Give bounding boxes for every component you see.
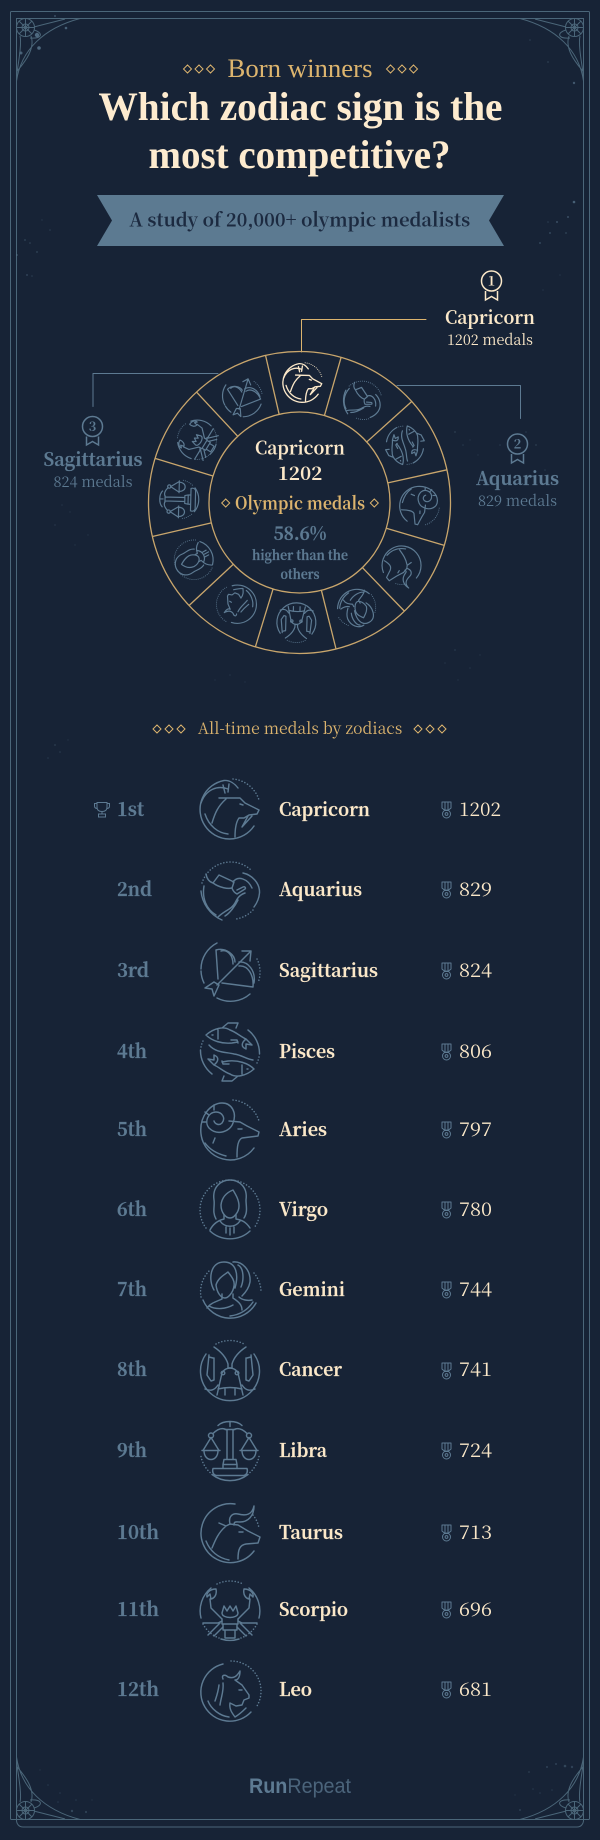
subtitle ribbon: A study of 20,000+ olympic medalists (129, 206, 470, 232)
row: 11th Scorpio (117, 1581, 492, 1640)
icon: medal (442, 1682, 451, 1698)
row: 6th Virgo: 6th (117, 1194, 147, 1222)
row: 8th Cancer: 8th (117, 1354, 147, 1382)
wheel icon: Scorpio (170, 413, 224, 467)
row: 9th Libra: 9th (117, 1435, 147, 1463)
icon: badge 2 (508, 434, 528, 463)
icon: badge 1 (482, 270, 502, 300)
wheel icon: Aries (399, 486, 440, 525)
row: 12th Leo (117, 1661, 492, 1721)
medal count: 824 medals (54, 471, 132, 492)
row: 10th Taurus (117, 1504, 492, 1563)
row: 8th Cancer: 741 (459, 1354, 492, 1382)
icon: trophy (94, 802, 110, 817)
icon: badge 1: 1 (488, 270, 495, 290)
logo: RunRepeat: RunRepeat (249, 1774, 351, 1798)
wheel icon: Pisces (379, 419, 431, 471)
row: 7th Gemini: 7th (117, 1274, 147, 1302)
subtitle ribbon (97, 195, 504, 246)
row: 4th Pisces: 4th (117, 1036, 147, 1064)
row: 2nd Aquarius: Aquarius (279, 875, 362, 902)
wheel icon: Gemini (330, 582, 383, 634)
connector line (397, 386, 520, 418)
wheel icon: Sagittarius (217, 371, 269, 424)
callout: 3rd Sagittarius (44, 374, 218, 492)
row: 5th Aries: 797 (459, 1114, 492, 1142)
row: 7th Gemini: 744 (459, 1274, 492, 1302)
medal count: 1202 medals (447, 329, 533, 350)
row: 6th Virgo: Virgo (279, 1195, 328, 1222)
icon: Pisces (200, 1023, 260, 1081)
sign name: Capricorn (445, 303, 535, 330)
row: 3rd Sagittarius: 3rd (117, 955, 149, 983)
row: 5th Aries: Aries (279, 1115, 327, 1142)
medal count: 829 medals (478, 490, 557, 511)
callout: 2nd Aquarius (397, 386, 559, 511)
icon: medal (442, 1525, 451, 1541)
zodiac wheel (148, 352, 450, 654)
row: 7th Gemini (117, 1262, 492, 1318)
row: 9th Libra: 724 (459, 1435, 492, 1463)
icon: Leo (201, 1661, 261, 1721)
row: 9th Libra (117, 1422, 492, 1481)
wheel centre text (222, 434, 378, 584)
row: 12th Leo: Leo (279, 1675, 312, 1702)
icon: medal (442, 1202, 451, 1218)
row: 5th Aries: 5th (117, 1114, 147, 1142)
row: 3rd Sagittarius (117, 943, 492, 1001)
wheel icon: Leo (209, 577, 264, 632)
icon: badge 3: 3 (89, 416, 97, 435)
kicker text: Born winners (228, 54, 372, 83)
icon: Sagittarius (201, 943, 260, 1001)
icon: medal (442, 802, 451, 818)
icon: medal (442, 1602, 451, 1618)
row: 8th Cancer (117, 1341, 492, 1401)
row: 4th Pisces: Pisces (279, 1037, 335, 1064)
row: 5th Aries (117, 1100, 492, 1160)
wheel icon: Virgo (167, 533, 220, 587)
icon: Capricorn (200, 779, 259, 839)
icon: medal (442, 963, 451, 979)
centre percent: 58.6% (274, 519, 326, 546)
row: 10th Taurus: Taurus (279, 1518, 343, 1545)
row: 4th Pisces: 806 (459, 1036, 492, 1064)
row: 12th Leo: 12th (117, 1674, 159, 1702)
connector line (93, 374, 218, 406)
rankings list (94, 779, 501, 1721)
icon: medal (442, 882, 451, 898)
row: 3rd Sagittarius: 824 (459, 955, 492, 983)
centre note line 2: others (280, 564, 320, 584)
icon: medal (442, 1443, 451, 1459)
callout: 1st Capricorn (302, 270, 535, 352)
title: most competitive? (148, 132, 450, 177)
left diamonds (184, 65, 214, 73)
row: 12th Leo: 681 (459, 1674, 492, 1702)
wheel icon: Aquarius (336, 374, 389, 427)
row: 6th Virgo (117, 1180, 492, 1239)
wheel icon: Capricorn (282, 362, 322, 403)
centre label: Olympic medals (235, 490, 365, 516)
icon: medal (442, 1363, 451, 1379)
centre count: 1202 (278, 459, 322, 486)
row: 2nd Aquarius: 2nd (117, 874, 152, 902)
kicker: Born winners (184, 54, 418, 83)
icon: badge 3 (82, 416, 102, 445)
row: 9th Libra: Libra (279, 1436, 328, 1463)
row: 2nd Aquarius (117, 862, 492, 920)
wheel rings (148, 352, 450, 654)
row: 1st Capricorn: Capricorn (279, 795, 370, 822)
icon: Taurus (201, 1504, 260, 1563)
row: 6th Virgo: 780 (459, 1194, 492, 1222)
icon: Gemini (201, 1262, 261, 1318)
section heading: All-time medals: All-time medals by zodiacs (198, 716, 402, 739)
row: 11th Scorpio: 696 (459, 1594, 492, 1622)
row: 2nd Aquarius: 829 (459, 874, 492, 902)
sign name: Aquarius (476, 464, 559, 491)
row: 1st Capricorn (94, 779, 501, 839)
icon: medal (442, 1282, 451, 1298)
row: 8th Cancer: Cancer (279, 1355, 342, 1382)
row: 11th Scorpio: 11th (117, 1594, 159, 1622)
wheel icon: Libra (159, 480, 199, 519)
row: 1st Capricorn: 1202 (459, 794, 501, 822)
centre label diamonds (222, 499, 378, 507)
centre note line 1: higher than the (252, 545, 348, 565)
icon: Libra (201, 1422, 259, 1481)
row: 4th Pisces (117, 1023, 492, 1081)
icon: medal (442, 1044, 451, 1060)
title: Which zodiac sign is the (98, 84, 502, 129)
icon: Aries (201, 1100, 259, 1160)
wheel icon: Cancer (276, 602, 316, 643)
sign name: Sagittarius (44, 445, 142, 472)
row: 1st Capricorn: 1st (117, 794, 144, 822)
title (98, 84, 502, 177)
row: 11th Scorpio: Scorpio (279, 1595, 348, 1622)
icon: badge 2: 2 (514, 434, 522, 452)
row: 3rd Sagittarius: Sagittarius (279, 956, 378, 983)
icon: Scorpio (200, 1581, 260, 1640)
icon: Virgo (200, 1180, 260, 1239)
row: 10th Taurus: 10th (117, 1517, 159, 1545)
centre sign: Capricorn (255, 434, 345, 460)
icon: medal (442, 1122, 451, 1138)
row: 10th Taurus: 713 (459, 1517, 492, 1545)
right diamonds (386, 65, 418, 73)
icon: Aquarius (201, 862, 260, 920)
row: 7th Gemini: Gemini (279, 1275, 345, 1302)
wheel icon: Taurus (375, 539, 428, 592)
connector line (302, 320, 426, 352)
icon: Cancer (200, 1341, 260, 1401)
